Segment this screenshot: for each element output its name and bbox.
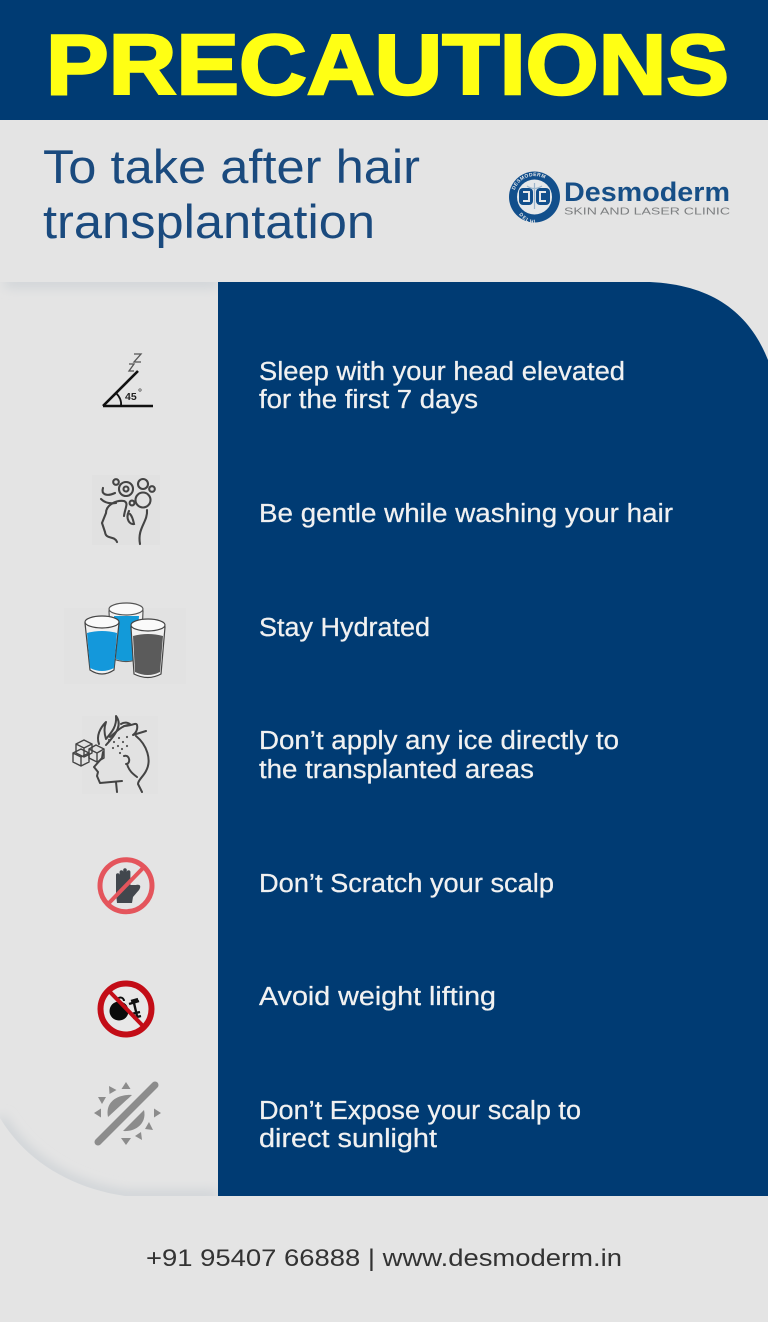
tip: ice text	[259, 727, 619, 784]
subtitle: To take after hair	[43, 140, 420, 193]
subtitle	[43, 140, 420, 248]
subtitle: transplantation	[43, 195, 375, 248]
tip: ice text: the transplanted areas	[259, 756, 534, 784]
icon: no scratching	[100, 860, 152, 912]
header band	[0, 0, 768, 120]
tip: weight lifting text: Avoid weight lifting	[259, 983, 496, 1011]
panel: navy tips	[218, 282, 768, 1196]
left panel inner shadow	[0, 282, 218, 1196]
logo: Desmoderm clinic: SKIN AND LASER CLINIC	[564, 206, 731, 218]
icon: glasses of water	[64, 603, 186, 684]
tip: sleep text: for the first 7 days	[259, 386, 478, 414]
icon: 45 degree sleep	[103, 354, 153, 406]
tip: sunlight text	[259, 1097, 581, 1153]
tip: hydrated text: Stay Hydrated	[259, 614, 430, 642]
icon: washing hair	[92, 475, 160, 545]
tip: sunlight text: direct sunlight	[259, 1125, 437, 1153]
tip: scratch text: Don’t Scratch your scalp	[259, 870, 554, 898]
icon: no sunlight	[94, 1082, 161, 1145]
tip: sleep text: Sleep with your head elevated	[259, 358, 625, 386]
tip: sleep text	[259, 358, 625, 414]
tip: ice text: Don’t apply any ice directly to	[259, 727, 619, 755]
logo: Desmoderm clinic: Desmoderm	[564, 177, 730, 207]
tip: sunlight text: Don’t Expose your scalp to	[259, 1097, 581, 1125]
icon: ice on head	[73, 716, 158, 794]
tip: washing text: Be gentle while washing your hair	[259, 500, 674, 528]
logo: Desmoderm clinic: DELHI	[519, 212, 536, 222]
icon: 45 degree sleep: 45	[125, 391, 137, 403]
icon: no weight lifting	[100, 984, 152, 1034]
logo: Desmoderm clinic: DESMODERM	[512, 172, 546, 190]
footer contact: +91 95407 66888 | www.desmoderm.in	[146, 1245, 622, 1272]
logo: Desmoderm clinic	[509, 172, 731, 222]
title: PRECAUTIONS	[46, 18, 729, 113]
